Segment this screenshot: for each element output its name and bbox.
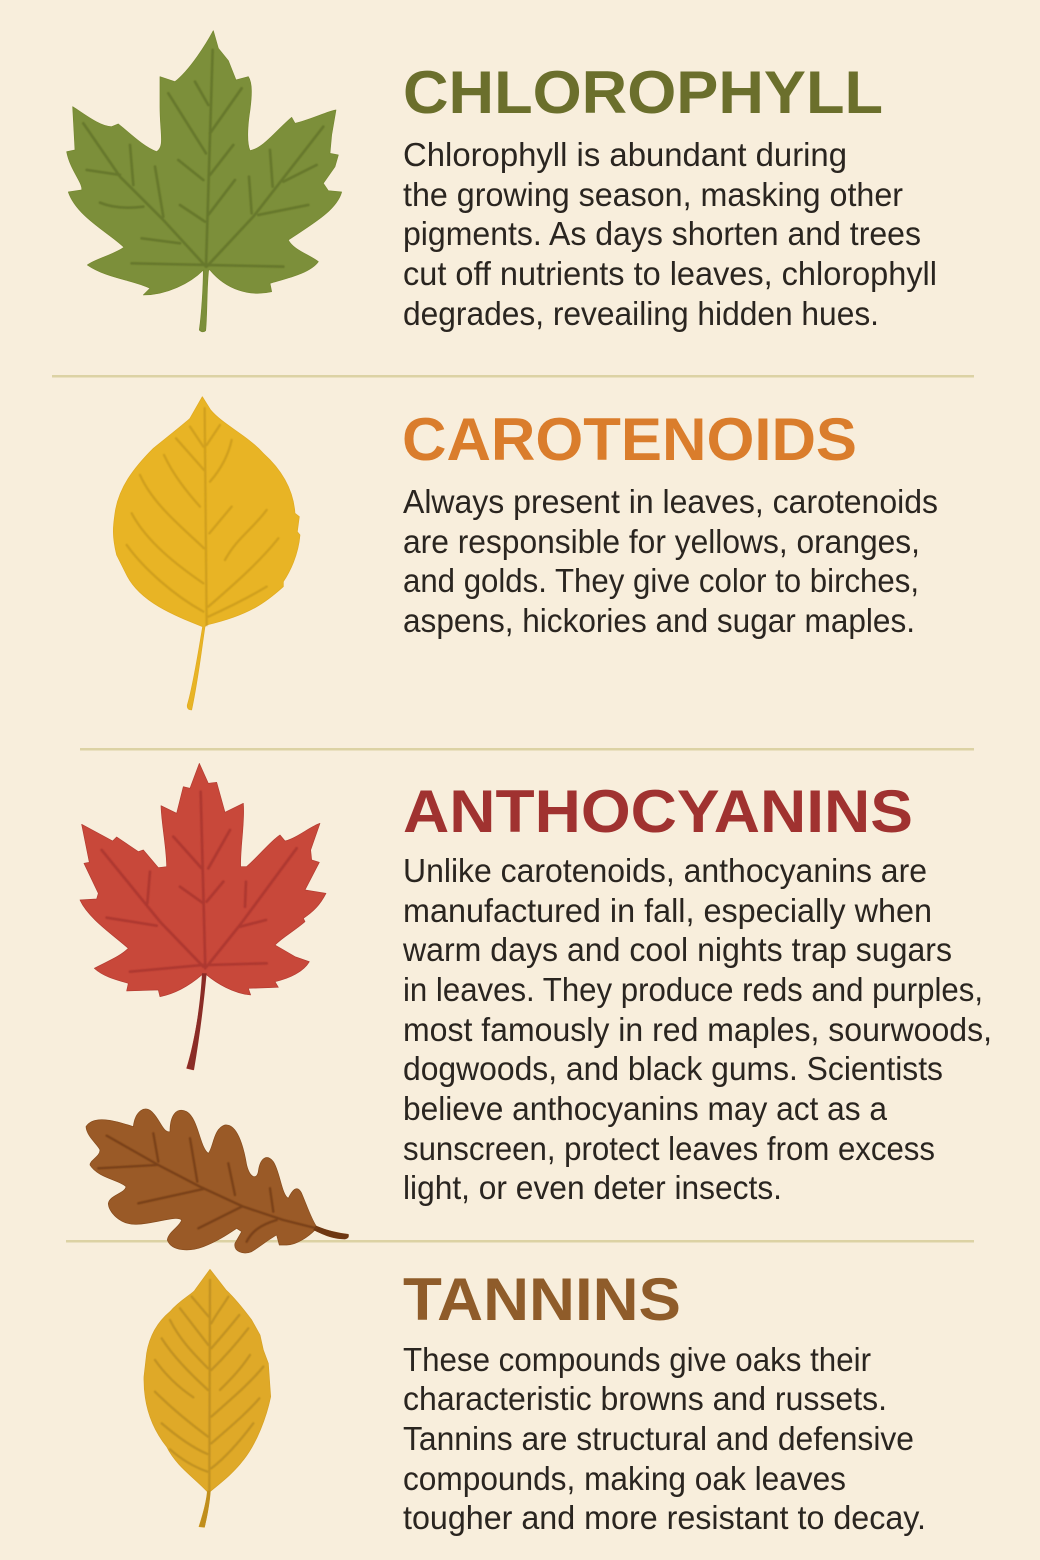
text block: anthocyanins: sunscreen, protect leaves from excess	[403, 1130, 935, 1167]
text block: tannins: Tannins are structural and defensive	[403, 1420, 914, 1457]
text block: chlorophyll: cut off nutrients to leaves, chlorophyll	[403, 255, 937, 292]
text block: anthocyanins: dogwoods, and black gums. Scientists	[403, 1050, 943, 1087]
text block: chlorophyll: the growing season, masking other	[403, 176, 903, 213]
text block: anthocyanins: Unlike carotenoids, anthocyanins are	[403, 852, 927, 889]
text block: tannins: characteristic browns and russets.	[403, 1380, 887, 1417]
text block: tannins: compounds, making oak leaves	[403, 1460, 846, 1497]
text block: chlorophyll	[403, 136, 937, 332]
text block: chlorophyll: pigments. As days shorten and trees	[403, 215, 921, 252]
text block: anthocyanins: manufactured in fall, especially when	[403, 892, 932, 929]
text block: carotenoids	[403, 483, 938, 639]
text block: carotenoids: are responsible for yellows, oranges,	[403, 523, 920, 560]
icon: green maple leaf	[67, 31, 342, 332]
text block: anthocyanins: believe anthocyanins may act as a	[403, 1090, 888, 1127]
text block: anthocyanins: light, or even deter insects.	[403, 1169, 782, 1206]
text block: tannins	[403, 1341, 926, 1536]
icon: brown oak leaf	[86, 1109, 348, 1253]
text block: carotenoids: Always present in leaves, carotenoids	[403, 483, 938, 520]
text block: tannins: These compounds give oaks their	[403, 1341, 871, 1378]
text block: anthocyanins: warm days and cool nights trap sugars	[402, 931, 952, 968]
heading: carotenoids: CAROTENOIDS	[402, 406, 857, 473]
icon: yellow birch leaf	[113, 397, 300, 710]
text block: carotenoids: and golds. They give color to birches,	[403, 562, 919, 599]
icon: golden beech leaf	[144, 1269, 271, 1527]
text block: anthocyanins	[402, 852, 992, 1206]
text block: carotenoids: aspens, hickories and sugar maples.	[403, 602, 915, 639]
heading: tannins: TANNINS	[403, 1266, 681, 1333]
text block: chlorophyll: Chlorophyll is abundant during	[403, 136, 847, 173]
text block: chlorophyll: degrades, reveailing hidden hues.	[403, 295, 879, 332]
text block: anthocyanins: in leaves. They produce reds and purples,	[403, 971, 983, 1008]
icon: red maple leaf	[80, 763, 326, 1070]
text block: tannins: tougher and more resistant to decay.	[403, 1499, 926, 1536]
heading: anthocyanins: ANTHOCYANINS	[403, 778, 913, 845]
heading: chlorophyll: CHLOROPHYLL	[403, 59, 883, 126]
text block: anthocyanins: most famously in red maples, sourwoods,	[403, 1011, 992, 1048]
